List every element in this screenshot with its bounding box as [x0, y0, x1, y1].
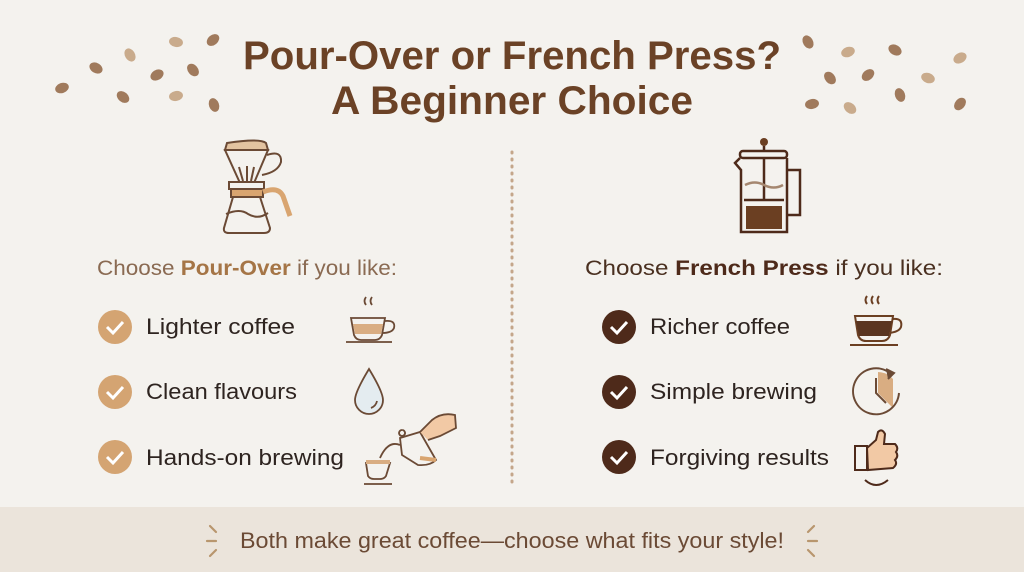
list: pour-over: Hands-on brewing [146, 445, 344, 470]
icon: timer [853, 368, 899, 414]
divider [510, 152, 514, 485]
icon: light cup [346, 297, 394, 342]
icon: dark cup [850, 296, 901, 345]
list: french press: Richer coffee [650, 314, 790, 339]
list: french press: Simple brewing [650, 379, 817, 404]
coffee beans right [800, 33, 969, 116]
icon: water drop [355, 369, 383, 414]
list: french press: Forgiving results [650, 445, 829, 470]
footer band [0, 507, 1024, 572]
icon: pour-over [224, 140, 290, 233]
heading: french press: Choose French Press if you like: [585, 257, 943, 280]
heading: pour-over: Choose Pour-Over if you like: [97, 257, 397, 280]
list: french press [602, 310, 829, 474]
icon: thumbs up [855, 430, 897, 485]
list: pour-over [98, 310, 344, 474]
title: A Beginner Choice [331, 79, 693, 123]
title [243, 34, 781, 123]
icon: kettle pouring [364, 414, 456, 484]
title: Pour-Over or French Press? [243, 34, 781, 78]
icon: french press [735, 138, 800, 232]
footer message: Both make great coffee—choose what fits your style! [240, 528, 784, 553]
coffee beans left [54, 32, 222, 113]
list: pour-over: Lighter coffee [146, 314, 295, 339]
list: pour-over: Clean flavours [146, 379, 297, 404]
